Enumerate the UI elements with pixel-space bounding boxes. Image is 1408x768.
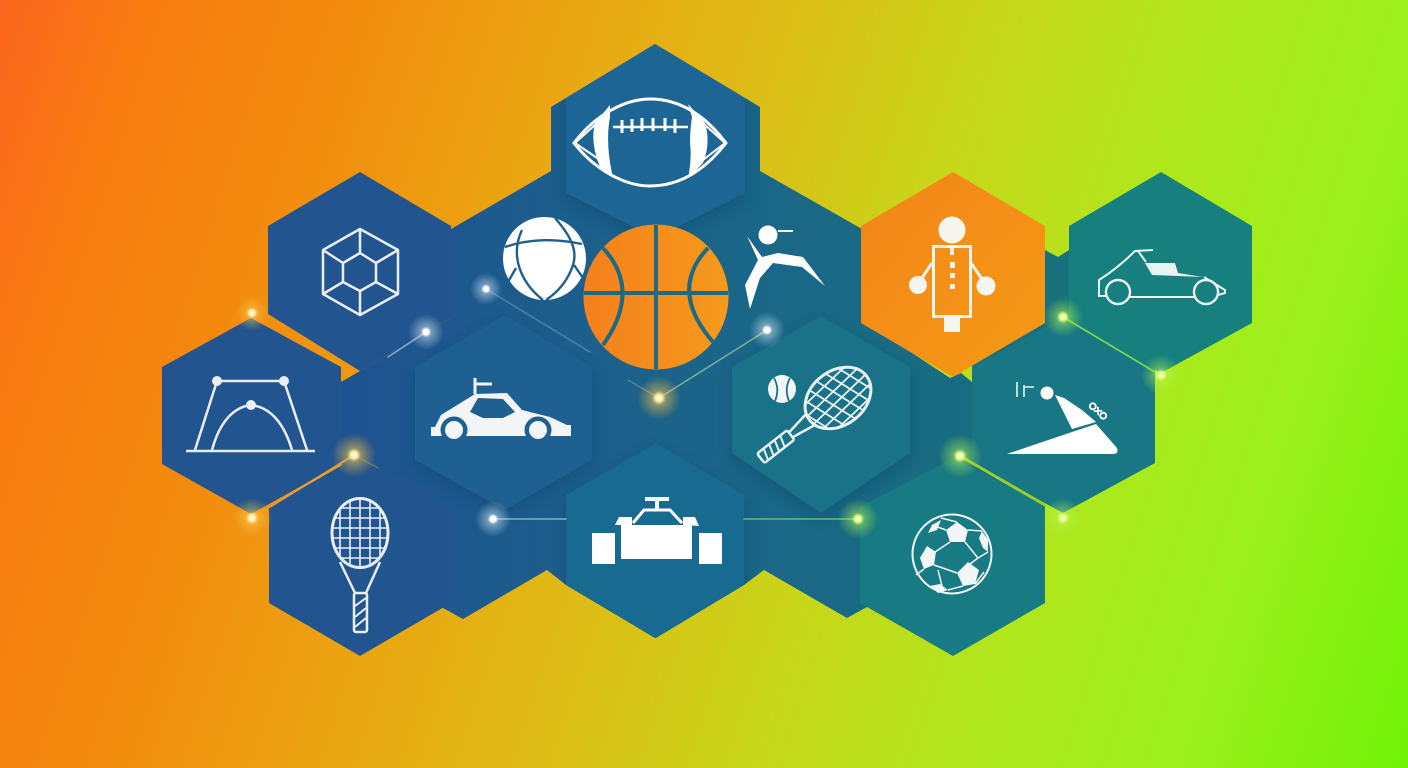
icon: geometric cube hexagon xyxy=(323,229,398,315)
icon: race car with flag xyxy=(431,378,571,444)
panel: tent hexagon xyxy=(162,318,341,514)
panel: lever hexagon xyxy=(972,318,1155,513)
panel: top hexagon xyxy=(566,44,745,238)
icon: tent arch xyxy=(186,376,315,451)
panel: outline car hexagon xyxy=(1069,172,1252,373)
icon: tennis ball and racket xyxy=(756,366,872,464)
soft shadows under inner hexagons xyxy=(414,194,911,638)
glowing connector nodes xyxy=(232,273,1181,539)
icon: formula car xyxy=(592,497,722,564)
icon: outline sports car xyxy=(1099,250,1225,304)
panel: orange highlighted hexagon xyxy=(861,172,1045,377)
panel: soccer hexagon xyxy=(860,458,1045,656)
icon: basketball xyxy=(584,224,728,370)
panel: race car hexagon xyxy=(415,315,592,510)
icon: soccer ball xyxy=(912,514,992,594)
panel: dark backing silhouette xyxy=(341,44,1100,638)
hexagon cluster infographic xyxy=(162,44,1252,656)
icon: american football xyxy=(574,99,726,186)
panel: racket hexagon xyxy=(269,455,451,656)
panel: formula car hexagon xyxy=(566,443,744,638)
icon: running figure xyxy=(745,226,825,309)
icon: orange hexagon figure xyxy=(909,216,996,332)
panel: tennis hexagon xyxy=(732,316,910,513)
icon: volleyball xyxy=(503,217,586,300)
panel: cube hexagon xyxy=(268,172,451,371)
connector lines xyxy=(270,289,1155,519)
icon: lever gauge xyxy=(1007,382,1118,454)
icon: vertical tennis racket xyxy=(330,495,390,632)
